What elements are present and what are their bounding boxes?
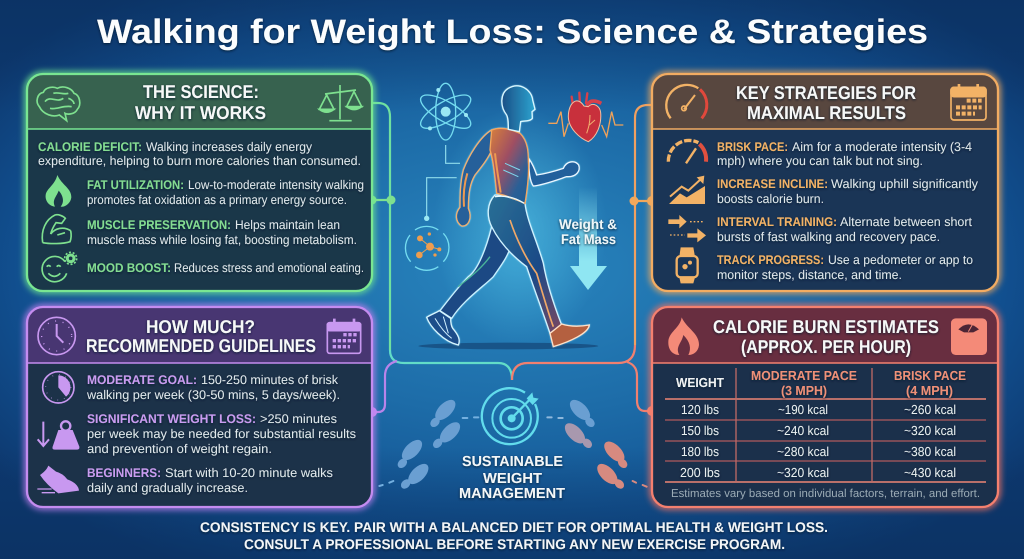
chart: calorie table <box>665 368 986 482</box>
text: muscle preservation: muscle mass while losing fat, boosting metabolism. <box>87 233 357 247</box>
heading: key strategies: KEY STRATEGIES FOR <box>736 82 916 103</box>
panel: how much <box>27 307 372 507</box>
chart: calorie table: 150 lbs <box>681 423 719 438</box>
icon: pie clock <box>43 372 74 403</box>
text: beginners: daily and gradually increase. <box>87 481 248 495</box>
text: fat utilization <box>87 178 364 207</box>
icon: speedometer <box>666 85 707 118</box>
chart: calorie table: ~320 kcal <box>904 423 956 438</box>
icon: weight down arrow <box>570 187 607 290</box>
heading: calorie burn: (APPROX. PER HOUR) <box>741 336 911 357</box>
chart: calorie table: 120 lbs <box>681 402 719 417</box>
icon: pace gauge <box>668 140 706 163</box>
text: calorie deficit <box>38 140 361 168</box>
text: beginners: Start with 10-20 minute walks <box>165 466 333 480</box>
text: brisk pace <box>717 140 972 168</box>
text: fat utilization: promotes fat oxidation as a primary energy source. <box>87 193 347 207</box>
footer message <box>200 519 828 552</box>
chart: calorie table: ~430 kcal <box>904 465 956 480</box>
panel: key strategies <box>652 74 998 291</box>
text: calorie deficit: expenditure, helping to burn more calories than consumed. <box>38 154 361 168</box>
heading: key strategies <box>736 82 916 123</box>
text: interval training: Alternate between short <box>840 215 972 229</box>
label: weight and fat mass <box>559 216 617 247</box>
text: significant weight loss: per week may be needed for substantial results <box>87 427 356 441</box>
heading: how much: RECOMMENDED GUIDELINES <box>86 335 316 356</box>
text: calorie deficit: CALORIE DEFICIT: <box>38 140 142 154</box>
heading: calorie burn <box>713 316 939 357</box>
icon: clock <box>38 317 75 355</box>
chart: calorie table: 200 lbs <box>680 465 720 480</box>
chart: calorie table: ~260 kcal <box>904 402 956 417</box>
icon: heart with pulse <box>548 93 623 142</box>
text: muscle preservation: Helps maintain lean <box>235 218 340 232</box>
icon: running shoe <box>37 466 79 493</box>
chart: calorie table: (4 MPH) <box>906 383 953 398</box>
text: brisk pace: Aim for a moderate intensity (3-4 <box>792 140 972 154</box>
heading: the science: THE SCIENCE: <box>143 81 259 102</box>
text: increase incline <box>717 177 979 206</box>
chart: calorie table: ~320 kcal <box>777 465 829 480</box>
icon: calendar <box>327 319 361 353</box>
chart: calorie table: ~380 kcal <box>904 444 956 459</box>
icon: flame <box>46 175 71 207</box>
heading: how much <box>86 316 316 356</box>
footer message: CONSULT A PROFESSIONAL BEFORE STARTING ANY NEW EXERCISE PROGRAM. <box>244 536 785 552</box>
icon: target <box>482 388 539 444</box>
text: mood boost <box>87 261 364 275</box>
central illustration: walking figure <box>418 86 607 349</box>
text: moderate goal: 150-250 minutes of brisk <box>201 373 339 387</box>
chart: calorie table: ~240 kcal <box>777 423 829 438</box>
icon: brain <box>37 87 80 121</box>
heading: calorie burn: CALORIE BURN ESTIMATES <box>713 316 939 337</box>
text: increase incline: INCREASE INCLINE: <box>717 177 828 191</box>
text: mood boost: MOOD BOOST: <box>87 261 171 275</box>
chart: calorie table: WEIGHT <box>676 375 724 390</box>
icon: atom <box>416 83 475 221</box>
text: track progress <box>717 253 973 282</box>
label: sustainable weight management <box>459 454 565 502</box>
text: fat utilization: FAT UTILIZATION: <box>87 178 184 192</box>
label: sustainable weight management: WEIGHT <box>483 471 542 487</box>
text: moderate goal: walking per week (30-50 mins, 5 days/week). <box>86 388 340 402</box>
text: calorie deficit: Walking increases daily energy <box>146 140 313 154</box>
text: interval training: INTERVAL TRAINING: <box>717 215 837 229</box>
text: significant weight loss: SIGNIFICANT WEIGHT LOSS: <box>87 412 256 426</box>
heading: how much: HOW MUCH? <box>146 316 255 337</box>
label: sustainable weight management: SUSTAINABLE <box>462 454 563 470</box>
text: brisk pace: BRISK PACE: <box>717 140 788 154</box>
icon: flame <box>668 317 699 355</box>
text: moderate goal: MODERATE GOAL: <box>87 373 197 387</box>
text: significant weight loss <box>87 412 356 456</box>
footer message: CONSISTENCY IS KEY. PAIR WITH A BALANCED DIET FOR OPTIMAL HEALTH & WEIGHT LOSS. <box>200 519 828 535</box>
text: fat utilization: Low-to-moderate intensity walking <box>188 178 364 192</box>
chart: calorie table: ~190 kcal <box>778 402 828 417</box>
icon: metabolism molecule <box>405 226 449 270</box>
label: weight and fat mass: Weight & <box>559 216 617 232</box>
icon: bathroom scale <box>951 318 987 355</box>
label: weight and fat mass: Fat Mass <box>561 231 616 247</box>
title: Walking for Weight Loss: Science & Strategies <box>97 13 928 51</box>
panel: calorie burn estimates <box>652 307 998 507</box>
text: beginners <box>87 466 333 495</box>
heading: the science <box>135 81 266 123</box>
text: significant weight loss: and prevention of weight regain. <box>87 442 272 456</box>
text: mood boost: Reduces stress and emotional eating. <box>174 261 364 275</box>
icon: balance scale <box>319 85 362 121</box>
chart: calorie table: MODERATE PACE <box>751 368 857 383</box>
text: track progress: Use a pedometer or app to <box>828 253 973 267</box>
icon: smile with gear <box>42 252 77 282</box>
chart: calorie table: (3 MPH) <box>781 383 827 398</box>
chart: calorie table: BRISK PACE <box>894 368 966 383</box>
text: muscle preservation <box>87 218 357 247</box>
heading: the science: WHY IT WORKS <box>135 102 266 123</box>
panel: the science <box>27 74 372 291</box>
text: significant weight loss: >250 minutes <box>260 412 337 426</box>
icon: incline chart <box>669 176 705 204</box>
text: muscle preservation: MUSCLE PRESERVATION: <box>87 218 231 232</box>
text: moderate goal <box>86 373 340 402</box>
text: track progress: TRACK PROGRESS: <box>717 253 824 267</box>
text: interval training <box>717 215 972 244</box>
text: beginners: BEGINNERS: <box>87 466 161 480</box>
connector lines <box>367 103 657 417</box>
footprints <box>379 396 647 491</box>
chart: calorie table: ~280 kcal <box>777 444 829 459</box>
heading: key strategies: MAXIMAL RESULTS <box>747 102 906 123</box>
table note: Estimates vary based on individual factors, terrain, and effort. <box>671 488 980 500</box>
icon: muscle arm <box>42 215 71 244</box>
icon: smartwatch <box>677 247 698 283</box>
icon: weight with down arrow <box>38 421 79 450</box>
icon: interval arrows <box>668 215 706 242</box>
text: increase incline: Walking uphill significantly <box>831 177 979 191</box>
chart: calorie table: 180 lbs <box>681 444 719 459</box>
text: increase incline: boosts calorie burn. <box>717 192 824 206</box>
text: brisk pace: mph) where you can talk but not sing. <box>717 154 923 168</box>
icon: calendar <box>951 84 986 120</box>
label: sustainable weight management: MANAGEMENT <box>459 486 565 502</box>
text: interval training: bursts of fast walking and recovery pace. <box>717 230 940 244</box>
text: track progress: monitor steps, distance, and time. <box>717 268 902 282</box>
